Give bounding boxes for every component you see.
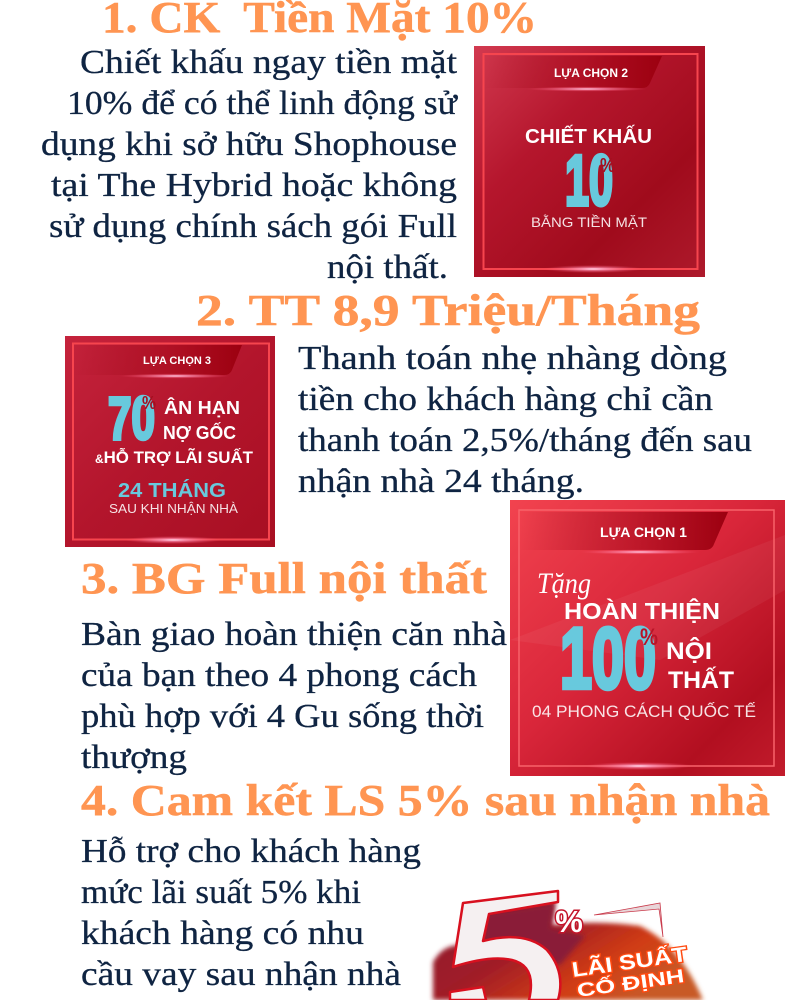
card: option 1, 100% furnished handover: 100 bbox=[560, 611, 656, 707]
section 3 heading: 3. BG Full nội thất bbox=[81, 554, 487, 603]
card: option 3, 70% grace period: % bbox=[142, 393, 156, 413]
card: option 1, 100% furnished handover: LỰA CHỌN 1 bbox=[600, 525, 688, 540]
section 4 paragraph: cầu vay sau nhận nhà bbox=[81, 956, 401, 993]
card: option 2, 10% cash discount: BẰNG TIỀN MẶT bbox=[531, 213, 647, 230]
card: option 3, 70% grace period: ÂN HẠN bbox=[164, 397, 240, 418]
section 2 paragraph: thanh toán 2,5%/tháng đến sau bbox=[298, 422, 752, 459]
card: option 3, 70% grace period: 70 bbox=[108, 385, 155, 452]
section 1 paragraph: nội thất. bbox=[327, 249, 448, 286]
section 2 paragraph: nhận nhà 24 tháng. bbox=[298, 463, 584, 500]
card: option 3, 70% grace period: 24 THÁNG bbox=[118, 479, 226, 502]
badge: 5% fixed interest: % bbox=[555, 904, 583, 939]
section 3 paragraph: phù hợp với 4 Gu sống thời bbox=[81, 698, 484, 735]
card: option 2, 10% cash discount: % bbox=[600, 155, 615, 177]
section 3 paragraph: của bạn theo 4 phong cách bbox=[81, 657, 477, 694]
card: option 3, 70% grace period: NỢ GỐC bbox=[163, 422, 236, 443]
section 4 paragraph bbox=[81, 833, 421, 993]
section 1 paragraph: tại The Hybrid hoặc không bbox=[51, 167, 457, 204]
card: option 2, 10% cash discount bbox=[474, 46, 705, 277]
card: option 1, 100% furnished handover: % bbox=[640, 624, 658, 651]
card: option 3, 70% grace period bbox=[65, 336, 275, 547]
badge: 5% fixed interest bbox=[433, 891, 703, 1000]
section 2 paragraph bbox=[298, 340, 752, 500]
card: option 2, 10% cash discount: CHIẾT KHẤU bbox=[525, 125, 652, 148]
section 1 paragraph bbox=[41, 44, 459, 286]
card: option 1, 100% furnished handover: 04 PHONG CÁCH QUỐC TẾ bbox=[532, 701, 756, 721]
card: option 3, 70% grace period: SAU KHI NHẬN NHÀ bbox=[109, 501, 239, 516]
section 3 paragraph bbox=[81, 616, 507, 776]
card: option 1, 100% furnished handover: NỘI bbox=[666, 637, 712, 665]
card: option 1, 100% furnished handover: THẤT bbox=[668, 666, 734, 694]
section 3 paragraph: Bàn giao hoàn thiện căn nhà bbox=[81, 616, 507, 653]
card: option 3, 70% grace period: LỰA CHỌN 3 bbox=[143, 355, 211, 367]
card: option 3, 70% grace period: &HỖ TRỢ LÃI SUẤT bbox=[95, 447, 254, 467]
card: option 1, 100% furnished handover: HOÀN THIỆN bbox=[564, 597, 720, 624]
section 1 paragraph: Chiết khấu ngay tiền mặt bbox=[80, 44, 458, 81]
card: option 2, 10% cash discount: LỰA CHỌN 2 bbox=[554, 68, 628, 80]
card: option 1, 100% furnished handover: Tặng bbox=[537, 567, 591, 600]
section 4 paragraph: khách hàng có nhu bbox=[81, 915, 364, 952]
section 4 paragraph: mức lãi suất 5% khi bbox=[81, 874, 361, 911]
card: option 1, 100% furnished handover bbox=[510, 500, 785, 776]
section 1 paragraph: sử dụng chính sách gói Full bbox=[49, 208, 457, 245]
section 1 paragraph: 10% để có thể linh động sử bbox=[67, 85, 459, 122]
section 4 heading: 4. Cam kết LS 5% sau nhận nhà bbox=[81, 776, 770, 825]
section 2 heading: 2. TT 8,9 Triệu/Tháng bbox=[196, 286, 700, 335]
section 1 paragraph: dụng khi sở hữu Shophouse bbox=[41, 126, 457, 163]
section 2 paragraph: Thanh toán nhẹ nhàng dòng bbox=[298, 340, 727, 377]
section 2 paragraph: tiền cho khách hàng chỉ cần bbox=[298, 381, 713, 418]
section 4 paragraph: Hỗ trợ cho khách hàng bbox=[81, 833, 421, 870]
section 3 paragraph: thượng bbox=[81, 739, 187, 776]
badge: 5% fixed interest: LÃI SUẤT bbox=[570, 943, 689, 982]
card: option 2, 10% cash discount: 10 bbox=[565, 142, 613, 221]
